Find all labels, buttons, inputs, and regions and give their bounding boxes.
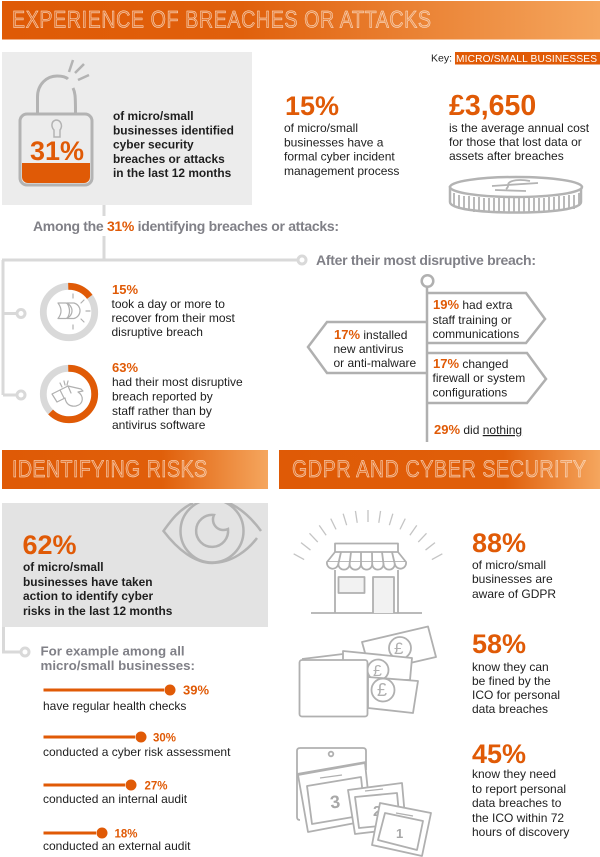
icon: shop xyxy=(294,510,442,613)
icon: eye xyxy=(164,500,261,563)
stat: 58% know they can be fined xyxy=(472,629,563,716)
text: 31% description: in the last 12 months xyxy=(113,166,232,180)
sign: 19% staff training: staff training or xyxy=(432,313,512,327)
bar: 27% internal audit xyxy=(43,780,188,806)
sign: 17% antivirus: installed xyxy=(360,328,407,342)
stat: 45% know they need to report: hours of discovery xyxy=(472,825,569,839)
stat: 88% aware of GDPR: aware of GDPR xyxy=(472,587,556,601)
stat: £3,650 average cost: is the average annual cost xyxy=(449,121,590,135)
sign: 17% firewall: 17% xyxy=(433,356,459,371)
bar: 18% external audit xyxy=(43,828,191,853)
heading banner: identifying risks: IDENTIFYING RISKS xyxy=(12,455,207,482)
heading: among the 31%: Among the 31% identifying breaches or attacks: xyxy=(33,218,339,234)
bar: 39% health checks: 39% xyxy=(183,682,209,698)
sign: 19% staff training xyxy=(428,293,545,343)
stat: 45% know they need to report: the ICO within 72 xyxy=(472,811,564,825)
text xyxy=(112,282,238,339)
bar: 30% risk assessment: conducted a cyber risk assessment xyxy=(43,745,231,759)
icon: broken padlock with 31% xyxy=(20,60,92,185)
stat: 88% aware of GDPR xyxy=(472,528,556,601)
icon: wallet and banknotes: £ xyxy=(394,639,404,658)
sign: 17% firewall: changed xyxy=(459,357,508,371)
signpost xyxy=(308,275,546,442)
icon: calendar pages 3 2 1: 2 xyxy=(373,803,381,820)
stat: 45% know they need to report: data breaches to xyxy=(472,796,562,810)
stat: 58% know they can be fined: be fined by the xyxy=(472,674,551,688)
text: had their most disruptive xyxy=(112,375,243,389)
icon: pound coin xyxy=(450,177,582,213)
donut chart: 15% with sun and moon icon xyxy=(43,286,95,338)
panel: 31% identified breaches xyxy=(2,52,252,205)
text: staff rather than by xyxy=(112,404,212,418)
stat: 88% aware of GDPR: 88% xyxy=(472,528,526,558)
text xyxy=(112,360,246,432)
key: MICRO/SMALL BUSINESSES xyxy=(456,54,597,65)
stat: £3,650 average cost: for those that lost data or xyxy=(449,135,582,149)
heading banner: experience of breaches or attacks xyxy=(2,1,600,40)
icon: calendar pages 3 2 1 xyxy=(297,748,431,856)
stat: £3,650 average cost: £3,650 xyxy=(449,90,536,122)
heading: after their most disruptive breach: After their most disruptive breach: xyxy=(316,252,536,268)
heading banner: identifying risks xyxy=(2,450,268,489)
sign: 17% antivirus: or anti-malware xyxy=(334,356,417,370)
text: disruptive breach xyxy=(112,325,203,339)
text: 62% description: businesses have taken xyxy=(23,575,153,589)
bar: 27% internal audit: conducted an internal audit xyxy=(43,792,188,806)
connector: risks to examples xyxy=(4,627,29,656)
bar: 27% internal audit: 27% xyxy=(144,780,168,792)
sign: 17% antivirus: new antivirus xyxy=(334,342,404,356)
connector lines xyxy=(2,205,306,399)
text: 62% description: of micro/small xyxy=(23,560,104,574)
signpost pole xyxy=(422,275,433,442)
stat: 62%: 62% xyxy=(22,530,77,560)
sun rays xyxy=(294,510,442,560)
donut chart: 63% with whistle icon xyxy=(43,368,95,420)
text: 29% did nothing: 29% did nothing xyxy=(434,422,522,437)
icon: calendar pages 3 2 1: 1 xyxy=(396,826,403,841)
stat: £3,650 average cost xyxy=(449,90,592,163)
text: breach reported by xyxy=(112,390,213,404)
stat: 58% know they can be fined: know they can xyxy=(472,660,549,674)
stat: 15% incident management: management process xyxy=(284,164,399,178)
icon: wallet and banknotes: £ xyxy=(377,680,387,700)
panel: 62% identifying risks xyxy=(2,500,268,627)
stat: 15% incident management: of micro/small xyxy=(284,121,358,135)
bar: 39% health checks: have regular health checks xyxy=(43,699,186,713)
stat: 58% know they can be fined: ICO for personal xyxy=(472,688,560,702)
sign: 17% firewall: configurations xyxy=(432,386,507,400)
stat: 15% incident management: 15% xyxy=(285,91,339,121)
sign: 17% antivirus xyxy=(308,322,427,373)
text: 15% xyxy=(112,282,138,297)
text: 31% description: cyber security xyxy=(113,138,194,152)
stat: 88% aware of GDPR: of micro/small xyxy=(472,558,546,572)
icon: broken padlock with 31%: 31% xyxy=(30,136,84,166)
stat: 45% know they need to report: 45% xyxy=(472,739,526,769)
heading: for example among all micro/small businesses: For example among all xyxy=(40,644,185,658)
stat: 15% took a day or more xyxy=(43,282,238,339)
sign: 17% firewall xyxy=(428,353,546,403)
bar: 18% external audit: 18% xyxy=(114,828,138,840)
stat: 45% know they need to report xyxy=(472,739,569,839)
bar: 30% risk assessment: 30% xyxy=(153,732,176,744)
text: 62% description: risks in the last 12 months xyxy=(23,604,173,618)
stat: 15% incident management: businesses have a xyxy=(284,136,384,150)
text: 31% description: of micro/small xyxy=(113,109,194,123)
text: recover from their most xyxy=(112,311,236,325)
stat: 45% know they need to report: know they need xyxy=(472,767,556,781)
icon: calendar pages 3 2 1: 3 xyxy=(329,792,341,812)
stat: 63% reported by staff xyxy=(43,360,246,432)
text: 62% description: action to identify cyber xyxy=(23,589,154,603)
icon: wallet and banknotes xyxy=(300,626,436,716)
heading banner: GDPR and cyber security: GDPR AND CYBER SECURITY xyxy=(292,455,586,482)
bar: 39% health checks xyxy=(43,682,209,713)
text: antivirus software xyxy=(112,418,206,432)
heading: for example among all micro/small businesses: micro/small businesses: xyxy=(40,658,195,673)
stat: 15% incident management xyxy=(284,91,399,178)
text: took a day or more to xyxy=(112,297,225,311)
sign: 17% firewall: firewall or system xyxy=(432,371,525,385)
sign: 19% staff training: had extra xyxy=(459,298,513,312)
text: 31% description: businesses identified xyxy=(113,123,234,137)
heading banner: experience of breaches or attacks: EXPERIENCE OF BREACHES OR ATTACKS xyxy=(12,5,431,33)
heading banner: GDPR and cyber security xyxy=(279,450,600,489)
key: Key: xyxy=(431,52,452,64)
stat: 58% know they can be fined: 58% xyxy=(472,629,526,659)
text: 31% description: breaches or attacks xyxy=(113,152,225,166)
sign: 17% antivirus: 17% xyxy=(334,327,360,342)
stat: 88% aware of GDPR: businesses are xyxy=(472,572,553,586)
sign: 19% staff training: communications xyxy=(432,327,519,341)
bar: 30% risk assessment xyxy=(43,732,231,759)
text: 63% xyxy=(112,360,138,375)
icon: wallet and banknotes: £ xyxy=(373,663,382,680)
stat: 45% know they need to report: to report personal xyxy=(472,782,566,796)
stat: 15% incident management: formal cyber incident xyxy=(284,150,395,164)
sign: 19% staff training: 19% xyxy=(433,297,459,312)
bar: 18% external audit: conducted an external audit xyxy=(43,839,191,853)
stat: 58% know they can be fined: data breaches xyxy=(472,702,548,716)
stat: £3,650 average cost: assets after breaches xyxy=(449,149,564,163)
